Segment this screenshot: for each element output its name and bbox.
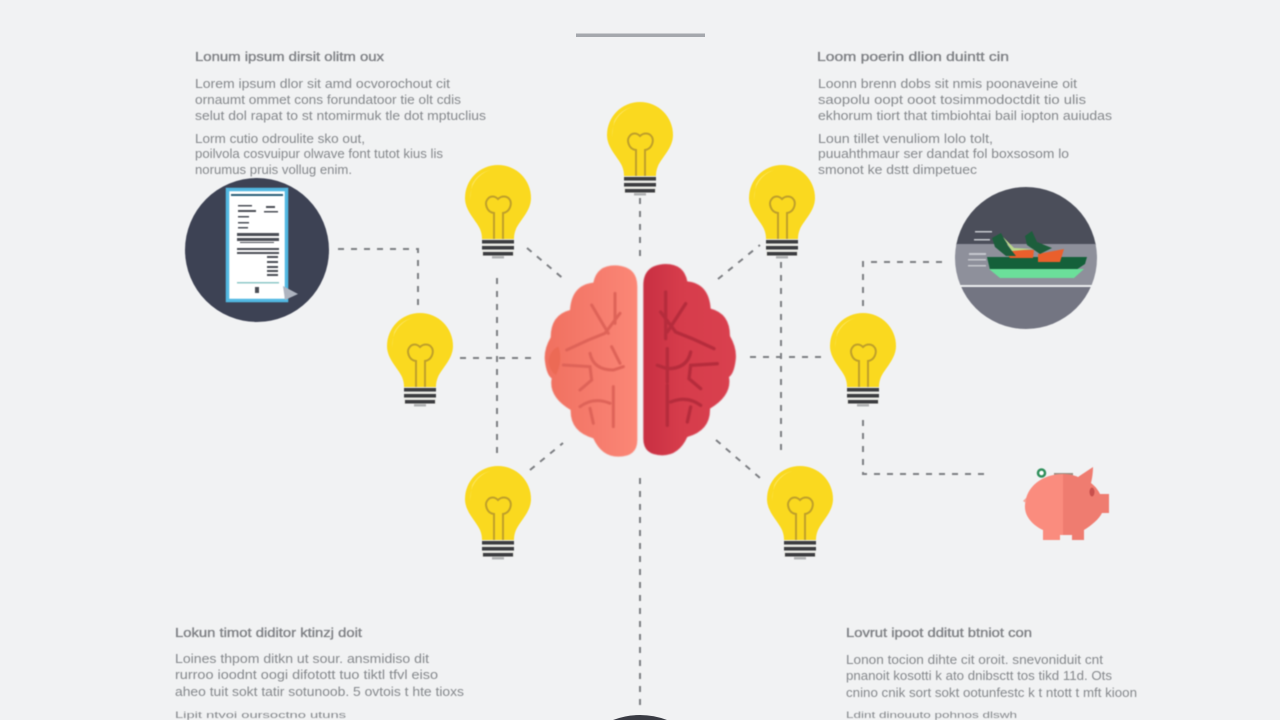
text block: top left [195,49,486,177]
bulb: top [607,102,673,196]
body text: top left: poilvola cosvuipur olwave font tutot kius lis [195,147,443,161]
body text: top right: puuahthmaur ser dandat fol boxsosom lo [818,147,1069,161]
bulb: middle left [387,313,453,406]
icon: speeding boat in circle [950,185,1105,332]
text block: top right [817,49,1112,177]
body text: top right: smonot ke dstt dimpetuec [818,163,977,177]
body text: top right [818,77,1112,177]
bulb: lower left [465,466,531,560]
bulb: upper left [465,165,531,258]
body text: bottom right: pnanoit kosotti k ato dnibsctt tos tikd 11d. Ots [846,669,1112,683]
body text: top right: saopolu oopt ooot tosimmodoctdit tio ulis [818,93,1086,107]
bulb: upper right [749,165,815,258]
body text: bottom left [175,652,464,720]
body text: bottom left: Loines thpom ditkn ut sour. ansmidiso dit [175,652,430,666]
body text: top right: Loonn brenn dobs sit nmis poonaveine oit [818,77,1078,91]
body text: top left: Lorm cutio odroulite sko out, [195,132,365,146]
icon: document in dark circle [185,178,329,322]
icon: piggy bank [1023,467,1109,540]
body text: top right: Loun tillet venuliom lolo tolt, [818,132,993,146]
body text: bottom left: rurroo ioodnt oogi difotott tuo tiktl tfvl eiso [175,668,438,682]
body text: bottom left: aheo tuit sokt tatir sotunoob. 5 ovtois t hte tioxs [175,685,464,699]
body text: top right: ekhorum tiort that timbiohtai bail iopton auiudas [818,109,1112,123]
icon: bottom dark circle [613,715,667,720]
bulb: lower right [767,466,833,560]
heading: bottom right: Lovrut ipoot dditut btniot con [846,625,1032,640]
bulb: middle right [830,313,896,406]
body text: top left: norumus pruis vollug enim. [195,163,352,177]
text block: bottom left [175,625,464,720]
body text: top left [195,77,486,177]
right hemisphere [643,264,736,455]
pig body [1025,474,1063,540]
heading: top left: Lonum ipsum dirsit olitm oux [195,49,385,64]
body text: top left: selut dol rapat to st ntomirmuk tle dot mptuclius [195,109,486,123]
body text: top left: Lorem ipsum dlor sit amd ocvorochout cit [195,77,451,91]
dashed connectors [338,198,985,706]
text block: bottom right [846,625,1137,720]
left hemisphere [545,265,637,457]
body text: top left: ornaumt ommet cons forundatoor tie olt cdis [195,93,461,107]
body text: bottom right: Lonon tocion dihte cit oroit. snevoniduit cnt [846,653,1104,667]
heading: bottom left: Lokun timot diditor ktinzj doit [175,625,362,640]
top rule [576,34,705,37]
heading: top right: Loom poerin dlion duintt cin [817,49,1009,64]
body text: bottom right: cnino cnik sort sokt ootunfestc k t ntott t mft kioon [846,686,1137,700]
body text: bottom right [846,653,1137,720]
coin [1038,470,1045,476]
icon: brain [545,264,736,457]
